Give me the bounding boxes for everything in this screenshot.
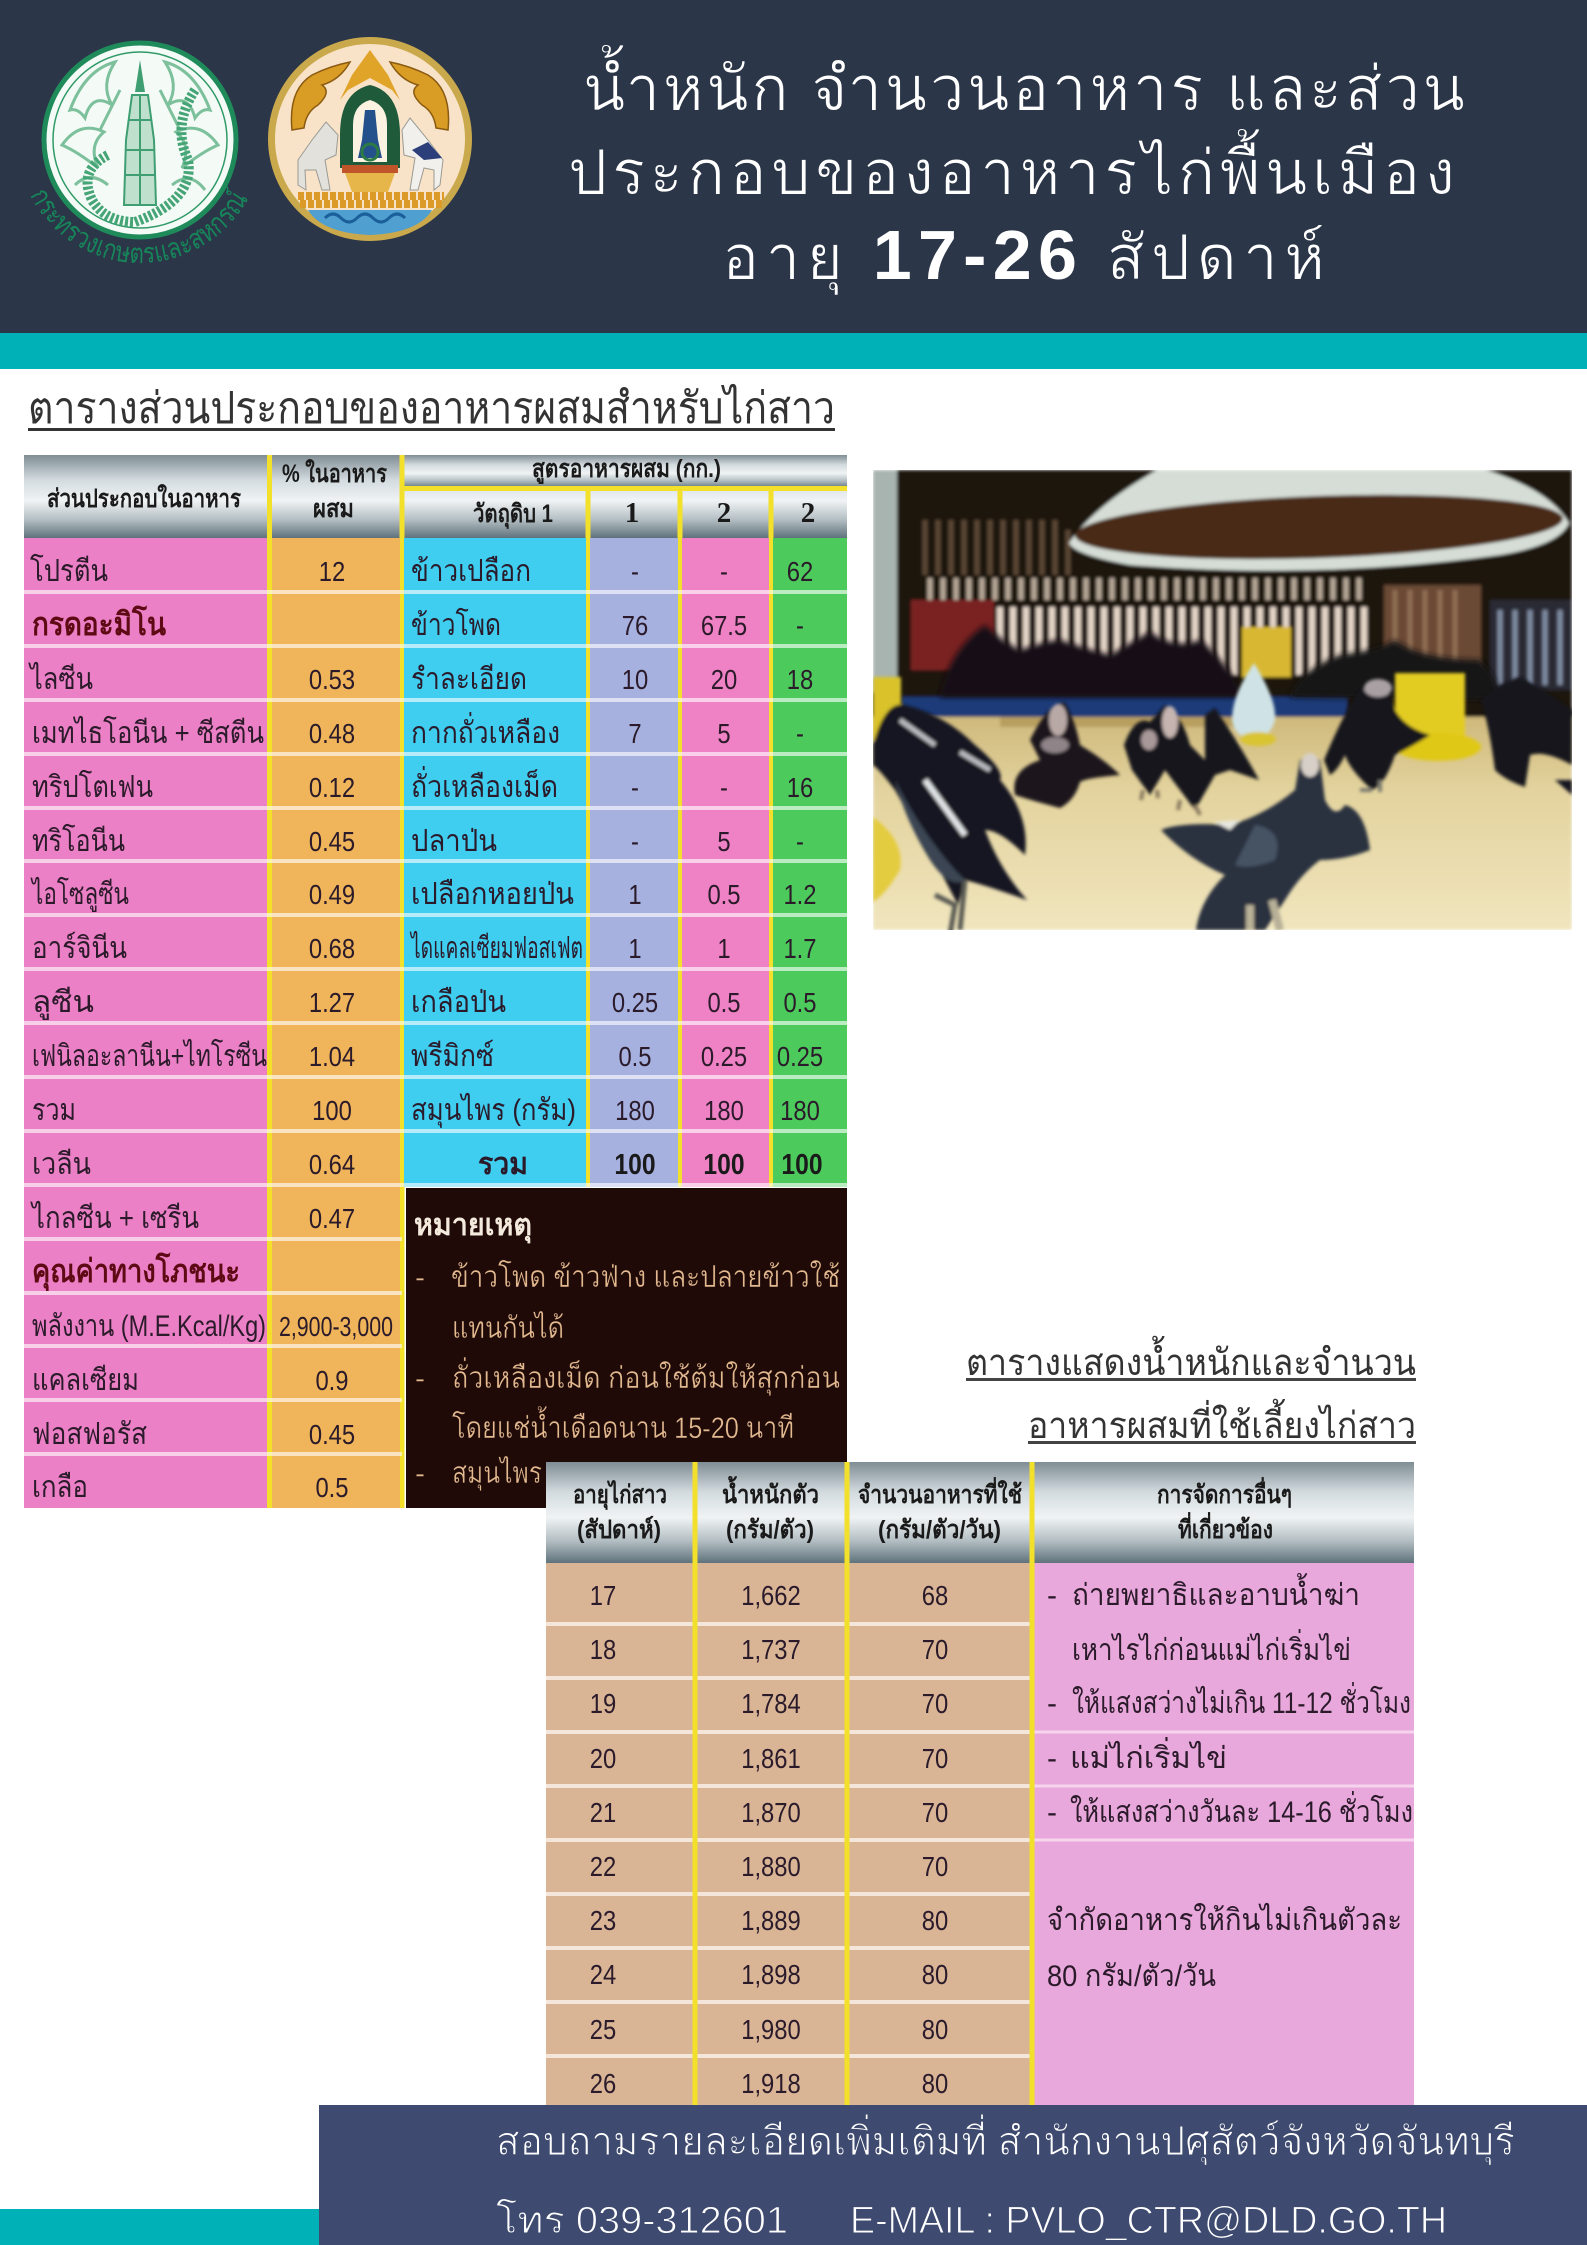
column: feed amount: 70: [922, 1796, 948, 1828]
panel: notes: หมายเหตุ: [414, 1209, 532, 1244]
column: percent in feed: 0.53: [309, 663, 355, 695]
column: nutrient names: อาร์จินีน: [32, 931, 127, 965]
panel: footer contact: [319, 2105, 1587, 2245]
column: body weight: 1,898: [741, 1958, 801, 1990]
column: formula 2: 0.25: [701, 1040, 747, 1072]
column: formula 1: 0.5: [618, 1040, 652, 1072]
column: formula 2: [701, 555, 747, 1180]
column: percent in feed: 0.64: [309, 1148, 355, 1180]
panel: notes: -: [415, 1261, 425, 1294]
column: raw materials: [410, 555, 583, 1181]
column: age in weeks: 24: [590, 1958, 616, 1990]
column: formula 2: -: [720, 555, 728, 587]
column: nutrient names: ทริโอนีน: [32, 823, 125, 858]
table header: 1: [625, 497, 639, 529]
column: nutrient names: เฟนิลอะลานีน+ไทโรซีน: [32, 1038, 267, 1073]
column: formula 2: 20: [711, 663, 737, 695]
panel: notes: -: [415, 1362, 425, 1395]
column: formula 3: 16: [787, 771, 813, 803]
column: raw materials: ข้าวโพด: [411, 607, 501, 642]
title: น้ำหนัก จำนวนอาหาร และส่วน: [583, 44, 1465, 124]
column: management notes: [1047, 1573, 1413, 1993]
icon: ministry of agriculture green seal: [30, 40, 248, 264]
column: feed amount: 70: [922, 1742, 948, 1774]
column: percent in feed: 0.9: [315, 1364, 349, 1396]
column: percent in feed: 0.45: [309, 1418, 355, 1450]
column: raw materials: ถั่วเหลืองเม็ด: [411, 766, 558, 804]
heading: weight and feed table: อาหารผสมที่ใช้เลี้ยงไก่สาว: [1028, 1398, 1416, 1446]
column: percent in feed: 0.12: [309, 771, 355, 803]
column: management notes: 80 กรัม/ตัว/วัน: [1047, 1960, 1216, 1993]
table header: (กรัม/ตัว/วัน): [878, 1516, 1001, 1544]
column: feed amount: 70: [922, 1687, 948, 1719]
column: formula 1: 76: [622, 609, 648, 641]
column: nutrient names: ไลซีน: [28, 661, 93, 696]
column: formula 2: 5: [717, 717, 731, 749]
column: formula 1: -: [631, 555, 639, 587]
title: [568, 44, 1465, 295]
column: age in weeks: [590, 1579, 616, 2099]
column: age in weeks: 22: [590, 1850, 616, 1882]
column: formula 3: 62: [787, 555, 813, 587]
column: raw materials: ปลาป่น: [411, 825, 497, 858]
panel: notes: -: [415, 1457, 425, 1490]
panel: notes: สมุนไพร: [452, 1455, 542, 1492]
column: age in weeks: 20: [590, 1742, 616, 1774]
table header: อายุไก่สาว: [573, 1479, 667, 1511]
column: age in weeks: 25: [590, 2013, 616, 2045]
column: formula 3: -: [796, 609, 804, 641]
column: nutrient names: ฟอสฟอรัส: [32, 1418, 147, 1451]
column: percent in feed: 0.47: [309, 1202, 355, 1234]
teal footer band: [0, 2209, 319, 2245]
column: nutrient names: เกลือ: [32, 1471, 88, 1504]
table header: สูตรอาหารผสม (กก.): [532, 455, 721, 485]
column: percent in feed: 2,900-3,000: [279, 1311, 393, 1342]
teal band: [0, 333, 1587, 369]
table header: ที่เกี่ยวข้อง: [1178, 1512, 1273, 1544]
column: percent in feed: 0.68: [309, 932, 355, 964]
heading: weight and feed table: ตารางแสดงน้ำหนักและจำนวน: [966, 1335, 1416, 1383]
table header: 2: [717, 497, 731, 529]
column: formula 2: -: [720, 771, 728, 803]
column: nutrient names: ไอโซลูซีน: [30, 876, 129, 912]
column: formula 1: 0.25: [612, 986, 658, 1018]
column: feed amount: 80: [922, 2067, 948, 2099]
column: percent in feed: 0.48: [309, 717, 355, 749]
column: age in weeks: 18: [590, 1633, 616, 1665]
column: formula 3: -: [796, 717, 804, 749]
column: formula 2: 67.5: [701, 609, 747, 641]
column: nutrient names: เวลีน: [32, 1148, 91, 1181]
panel: weight and feed table: [546, 1462, 1414, 2108]
column: body weight: 1,662: [741, 1579, 801, 1611]
column: formula 2: 1: [717, 932, 731, 964]
table header: (กรัม/ตัว): [726, 1516, 814, 1544]
column fills: [24, 538, 847, 1508]
column: body weight: 1,870: [741, 1796, 801, 1828]
column: nutrient names: พลังงาน (M.E.Kcal/Kg): [32, 1310, 266, 1343]
column: management notes: แม่ไก่เริ่มไข่: [1070, 1737, 1227, 1775]
column: nutrient names: กรดอะมิโน: [32, 605, 166, 642]
column: formula 1: [612, 555, 658, 1180]
column: formula 3: 180: [780, 1094, 820, 1126]
column: formula 1: 1: [628, 932, 642, 964]
column: raw materials: เกลือป่น: [411, 986, 506, 1019]
column: formula 1: 7: [628, 717, 642, 749]
column: formula 2: 100: [703, 1148, 745, 1180]
column: feed amount: 70: [922, 1633, 948, 1665]
column: age in weeks: 23: [590, 1904, 616, 1936]
column: formula 3: -: [796, 825, 804, 857]
table header: 2: [801, 497, 815, 529]
column: body weight: 1,784: [741, 1687, 801, 1719]
column: body weight: 1,918: [741, 2067, 801, 2099]
icon: ministry of agriculture green seal: กระทรวงเกษตรและสหกรณ์: [30, 186, 248, 264]
column: raw materials: รำละเอียด: [411, 663, 527, 696]
table header: น้ำหนักตัว: [722, 1475, 819, 1509]
column: formula 1: 10: [622, 663, 648, 695]
panel: notes: ถั่วเหลืองเม็ด ก่อนใช้ต้มให้สุกก่อน: [452, 1357, 840, 1397]
column: raw materials: ไดแคลเซียมฟอสเฟต: [410, 930, 583, 965]
column: formula 1: 180: [615, 1094, 655, 1126]
table header: จำนวนอาหารที่ใช้: [858, 1477, 1022, 1509]
column: management notes: เหาไรไก่ก่อนแม่ไก่เริ่มไข่: [1072, 1629, 1351, 1667]
column: age in weeks: 17: [590, 1579, 616, 1611]
column: body weight: 1,880: [741, 1850, 801, 1882]
column: management notes: ถ่ายพยาธิและอาบน้ำฆ่า: [1072, 1573, 1360, 1612]
column: feed amount: [922, 1579, 948, 2099]
panel: notes: [406, 1188, 847, 1508]
column: nutrient names: ลูซีน: [32, 986, 94, 1020]
column: formula 2: 5: [717, 825, 731, 857]
column: nutrient names: ไกลซีน + เซรีน: [30, 1200, 199, 1235]
column: feed amount: 70: [922, 1850, 948, 1882]
column: management notes: ให้แสงสว่างไม่เกิน 11-12 ชั่วโมง: [1072, 1682, 1411, 1720]
column: formula 3: [777, 555, 823, 1180]
column: percent in feed: 1.27: [309, 986, 355, 1018]
table header: วัตถุดิบ 1: [473, 500, 553, 530]
panel: notes: แทนกันได้: [452, 1310, 564, 1345]
column: nutrient names: คุณค่าทางโภชนะ: [32, 1252, 240, 1292]
column: feed amount: 80: [922, 2013, 948, 2045]
panel: footer contact: สอบถามรายละเอียดเพิ่มเติมที่ สำนักงานปศุสัตว์จังหวัดจันทบุรี: [496, 2114, 1515, 2166]
column: age in weeks: 26: [590, 2067, 616, 2099]
column: feed amount: 68: [922, 1579, 948, 1611]
column: raw materials: พรีมิกซ์: [411, 1039, 494, 1073]
column: management notes: -: [1047, 1742, 1057, 1775]
column: formula 2: 180: [704, 1094, 744, 1126]
table header: % ในอาหาร: [282, 458, 387, 488]
column: body weight: 1,889: [741, 1904, 801, 1936]
column: formula 1: -: [631, 771, 639, 803]
column: body weight: 1,980: [741, 2013, 801, 2045]
panel: notes: ข้าวโพด ข้าวฟ่าง และปลายข้าวใช้: [451, 1259, 840, 1294]
icon: department of livestock gold seal: [268, 37, 472, 241]
panel: notes: โดยแช่น้ำเดือดนาน 15-20 นาที: [452, 1406, 794, 1445]
column: formula 1: 100: [614, 1148, 656, 1180]
column: formula 2: 0.5: [707, 986, 741, 1018]
column: management notes: -: [1047, 1796, 1057, 1829]
column: feed amount: 80: [922, 1958, 948, 1990]
column: raw materials: เปลือกหอยป่น: [411, 878, 574, 911]
column: management notes: -: [1047, 1579, 1057, 1612]
column: percent in feed: 1.04: [309, 1040, 355, 1072]
column: percent in feed: 0.45: [309, 825, 355, 857]
panel: footer contact: E-MAIL : PVLO_CTR@DLD.GO.TH: [850, 2200, 1447, 2242]
column: feed amount: 80: [922, 1904, 948, 1936]
column: raw materials: ข้าวเปลือก: [411, 555, 531, 588]
column: raw materials: กากถั่วเหลือง: [411, 712, 560, 750]
table header: ส่วนประกอบในอาหาร: [47, 483, 241, 513]
panel: feed composition table: [24, 455, 847, 1508]
column: percent in feed: 12: [319, 555, 345, 587]
column: raw materials: สมุนไพร (กรัม): [411, 1092, 576, 1129]
column: nutrient names: เมทไธโอนีน + ซีสตีน: [32, 715, 264, 750]
column: formula 3: 0.25: [777, 1040, 823, 1072]
column: formula 3: 1.2: [783, 878, 817, 910]
column: management notes: ให้แสงสว่างวันละ 14-16 ชั่วโมง: [1070, 1791, 1413, 1829]
table header: ผสม: [313, 495, 354, 523]
column: formula 3: 1.7: [783, 932, 817, 964]
title: ประกอบของอาหารไก่พื้นเมือง: [568, 128, 1455, 208]
panel: footer contact: โทร 039-312601: [496, 2198, 788, 2242]
column: percent in feed: 0.49: [309, 878, 355, 910]
column: nutrient names: แคลเซียม: [32, 1364, 139, 1397]
column: percent in feed: [279, 555, 393, 1503]
title: อายุ 17-26 สัปดาห์: [722, 216, 1325, 295]
column: formula 1: 1: [628, 878, 642, 910]
column: age in weeks: 19: [590, 1687, 616, 1719]
column: body weight: [741, 1579, 801, 2099]
photo: native chickens in a poultry house: [873, 470, 1572, 935]
column: nutrient names: [28, 553, 267, 1504]
column: nutrient names: ทริปโตเฟน: [32, 769, 153, 804]
column: formula 1: -: [631, 825, 639, 857]
column: nutrient names: รวม: [32, 1094, 76, 1127]
column: formula 2: 0.5: [707, 878, 741, 910]
column: formula 3: 0.5: [783, 986, 817, 1018]
column: management notes: -: [1047, 1687, 1057, 1720]
table header: [546, 1462, 1414, 1563]
table header: การจัดการอื่นๆ: [1157, 1477, 1292, 1509]
column: formula 3: 18: [787, 663, 813, 695]
column: management notes: จำกัดอาหารให้กินไม่เกินตัวละ: [1047, 1902, 1402, 1937]
column: body weight: 1,737: [741, 1633, 801, 1665]
heading: feed composition table: ตารางส่วนประกอบของอาหารผสมสำหรับไก่สาว: [28, 383, 835, 433]
column: percent in feed: 100: [312, 1094, 352, 1126]
table header: [24, 455, 847, 1508]
heading: weight and feed table: [966, 1335, 1416, 1446]
column: raw materials: รวม: [478, 1148, 528, 1181]
header banner: [0, 0, 1587, 333]
column: formula 3: 100: [781, 1148, 823, 1180]
column: body weight: 1,861: [741, 1742, 801, 1774]
column: nutrient names: โปรตีน: [30, 553, 108, 588]
column: percent in feed: 0.5: [315, 1471, 349, 1503]
table header: (สัปดาห์): [577, 1515, 661, 1544]
column: age in weeks: 21: [590, 1796, 616, 1828]
